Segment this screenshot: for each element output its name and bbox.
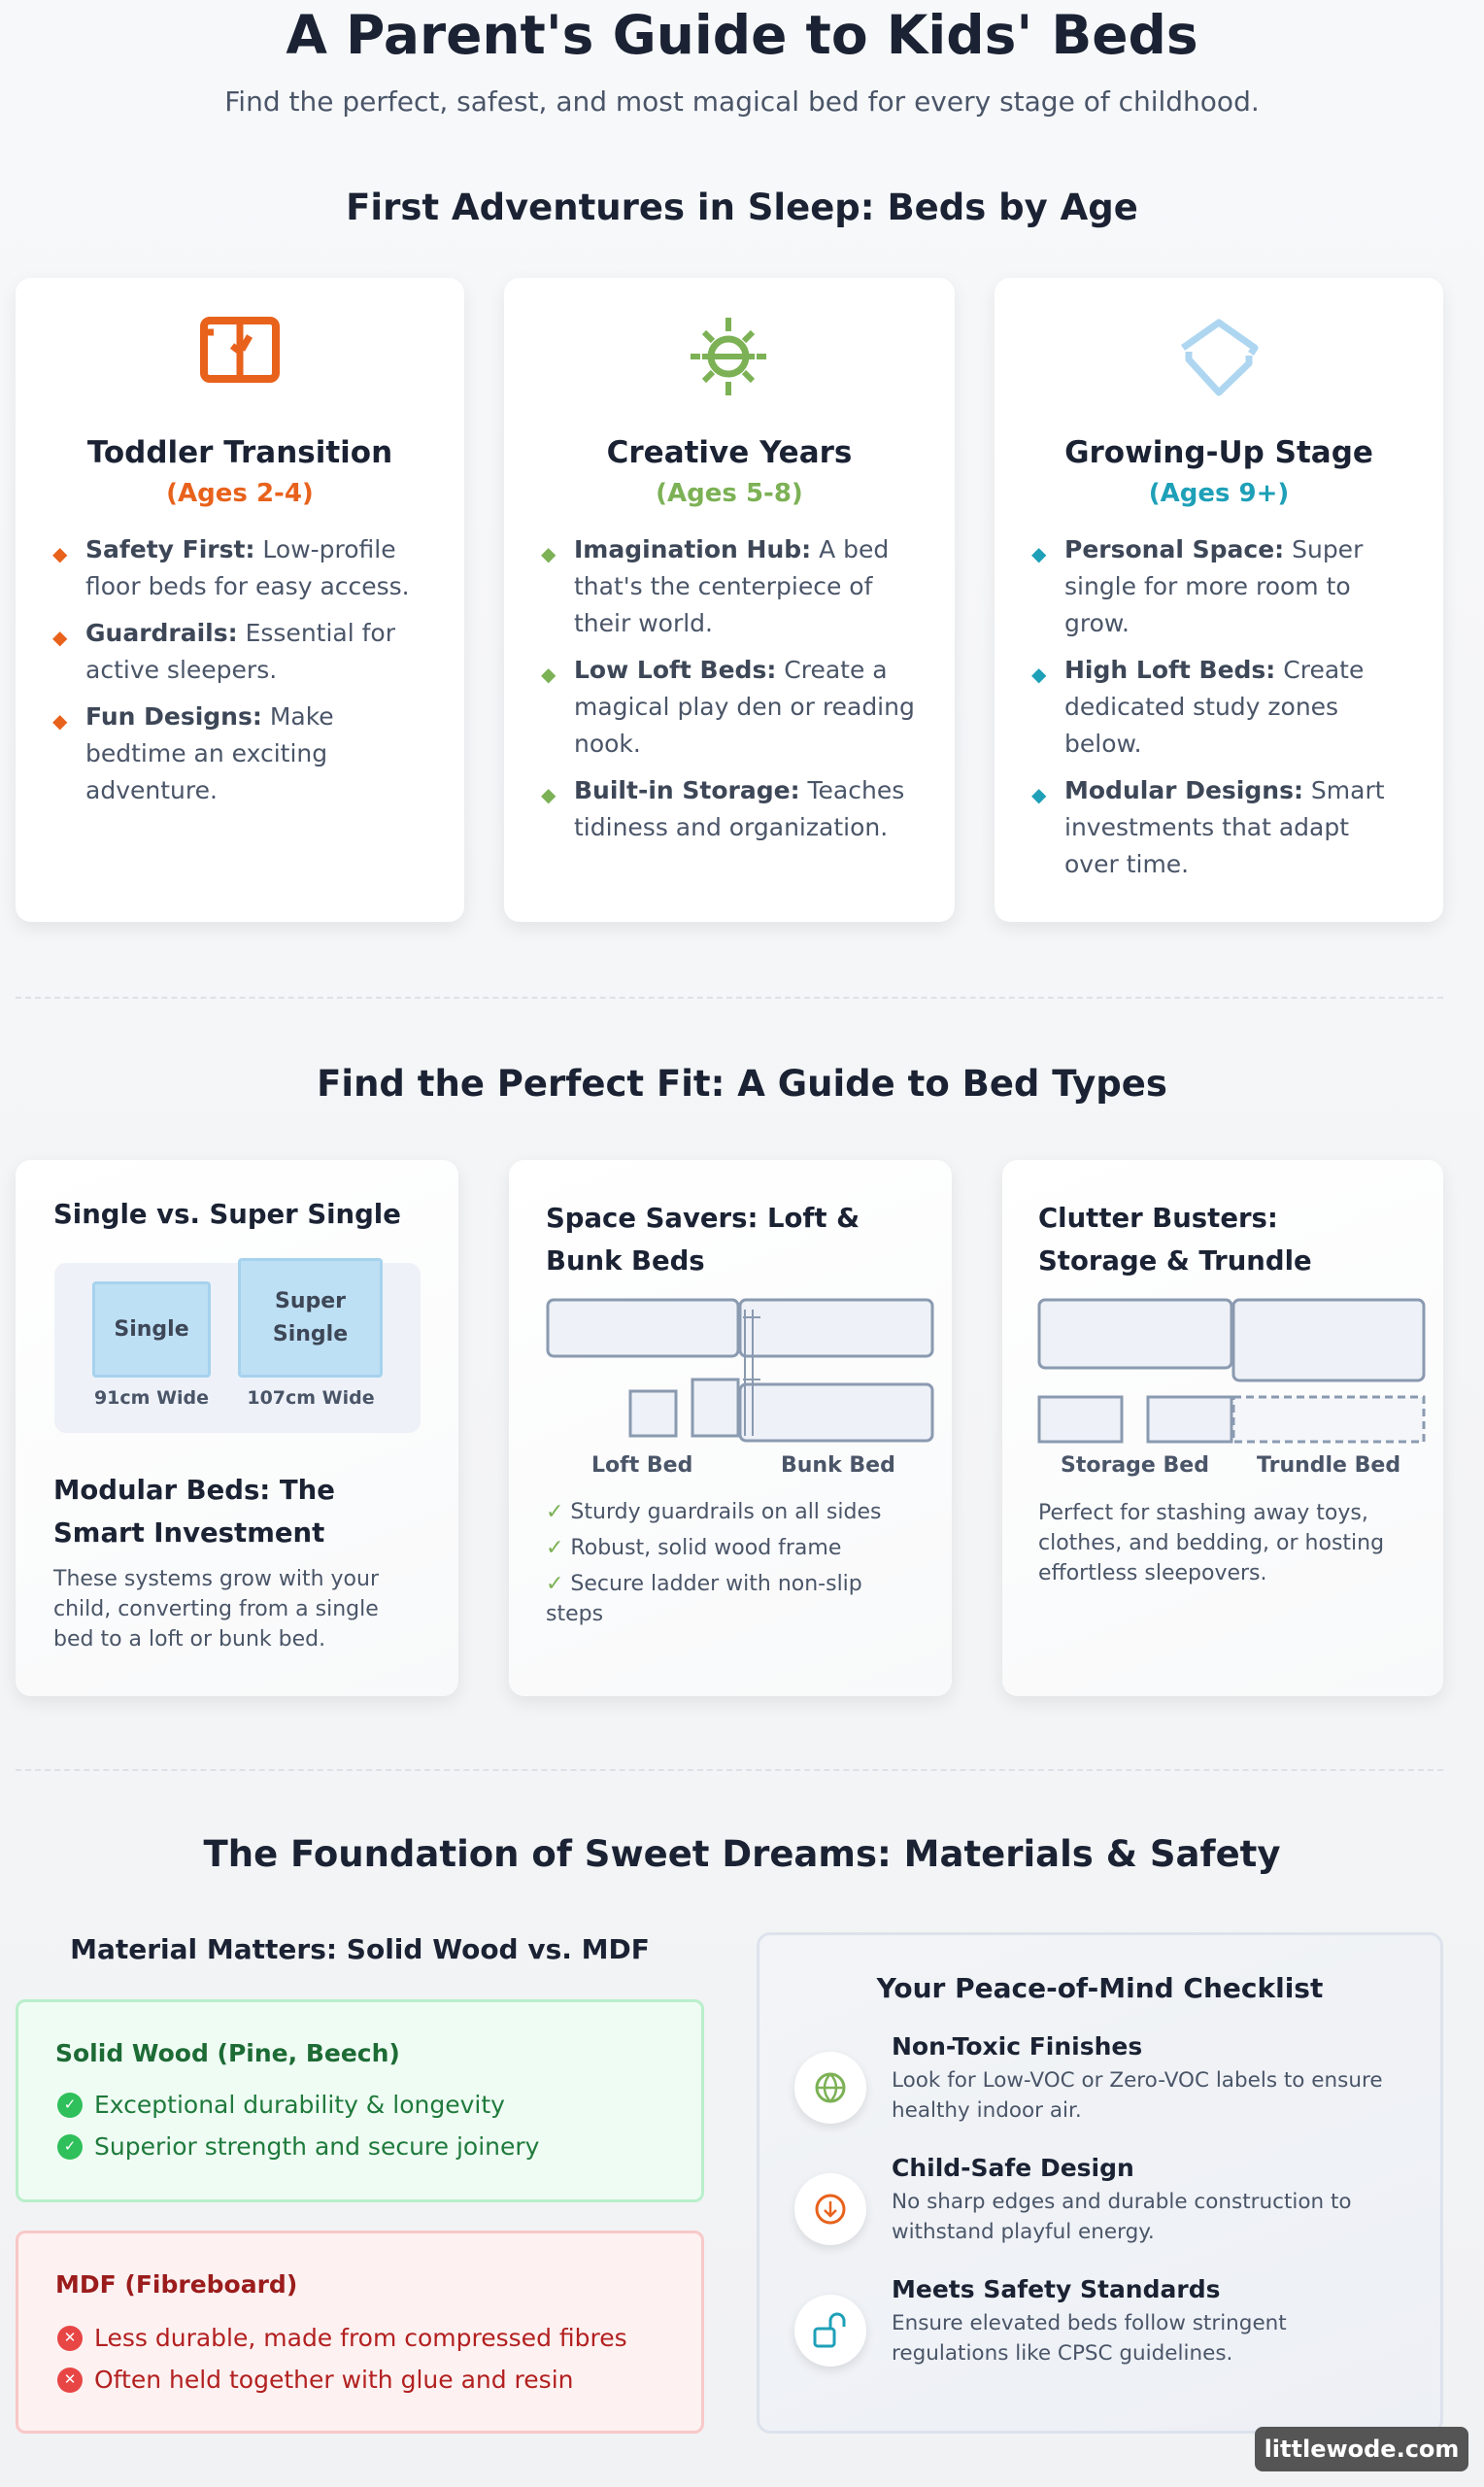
panel: checklist — [757, 1932, 1443, 2434]
cons list: Less durable, made from compressed fibres — [94, 2324, 627, 2352]
heading — [1038, 1203, 1312, 1277]
age label: (Ages 9+) — [1149, 479, 1289, 508]
modular heading: Modular Beds: The — [53, 1475, 335, 1506]
cons list: ✕ — [64, 2370, 76, 2388]
section heading: materials & safety: The Foundation of Sweet Dreams: Materials & Safety — [204, 1833, 1280, 1875]
item: non-toxic: Look for Low-VOC or Zero-VOC labels to ensure healthy indoor air. — [892, 2068, 1383, 2123]
item: child-safe: No sharp edges and durable construction to withstand playful energy. — [892, 2190, 1352, 2244]
bullet list: ◆ — [52, 626, 67, 649]
panel: toddler — [16, 278, 464, 922]
diagram: storage and trundle beds — [1037, 1298, 1426, 1444]
heading: Bunk Beds — [546, 1245, 705, 1277]
checklist: ✓ Sturdy guardrails on all sides — [546, 1500, 881, 1524]
heading: Solid Wood (Pine, Beech) — [55, 2039, 400, 2067]
cons list: ✕ — [64, 2329, 76, 2346]
panel: storage & trundle — [1002, 1160, 1443, 1696]
heading: Your Peace-of-Mind Checklist — [877, 1972, 1323, 2004]
heading: Toddler Transition — [87, 435, 392, 470]
description: Perfect for stashing away toys, clothes, and bedding, or hosting effortless sleepovers. — [1038, 1501, 1384, 1585]
cons list — [57, 2324, 627, 2394]
watermark: littlewode.com — [1265, 2436, 1459, 2463]
panel: single vs super single — [16, 1160, 458, 1696]
bullet list: ◆ — [1031, 663, 1046, 686]
panel: MDF — [16, 2231, 704, 2434]
heading: Growing-Up Stage — [1064, 435, 1373, 470]
panel: solid wood — [16, 1999, 704, 2202]
bullet list — [1031, 535, 1385, 878]
super single box: Super — [275, 1288, 346, 1313]
diagram labels: Loft Bed — [591, 1453, 692, 1478]
heading: Single vs. Super Single — [53, 1199, 401, 1230]
width labels: 91cm Wide — [94, 1387, 209, 1409]
bullet list: Personal Space: Super single for more room to grow. — [1064, 535, 1363, 637]
heading: Creative Years — [607, 435, 852, 470]
panel: growing up — [995, 278, 1443, 922]
pros list: ✓ — [64, 2095, 76, 2113]
size comparison diagram: 107cm Wide — [247, 1387, 375, 1409]
diagram labels: Storage Bed — [1061, 1453, 1209, 1478]
size comparison diagram — [54, 1263, 421, 1433]
modular heading: Smart Investment — [53, 1517, 324, 1549]
heading: Space Savers: Loft & — [546, 1203, 860, 1234]
panel: creative years — [504, 278, 955, 922]
icon: globe — [794, 2052, 866, 2124]
panel: loft & bunk: Bunk Bed — [781, 1453, 895, 1478]
subtitle: Find the perfect, safest, and most magical bed for every stage of childhood. — [224, 85, 1260, 118]
bullet list: ◆ — [541, 783, 556, 806]
bullet list: Guardrails: Essential for active sleepers. — [85, 619, 395, 684]
icon: arrow circle — [794, 2173, 866, 2245]
bullet list: ◆ — [52, 542, 67, 565]
heading: Storage & Trundle — [1038, 1245, 1312, 1277]
modular text: These systems grow with your child, converting from a single bed to a loft or bunk bed. — [53, 1567, 379, 1652]
bullet list: Imagination Hub: A bed that's the centerpiece of their world. — [574, 535, 889, 637]
item: standards — [793, 2275, 1287, 2372]
bullet list: ◆ — [1031, 783, 1046, 806]
single box — [92, 1281, 211, 1378]
heading — [546, 1203, 860, 1277]
icon: padlock — [794, 2295, 866, 2367]
bullet list: High Loft Beds: Create dedicated study zones below. — [1064, 656, 1364, 758]
bullet list — [541, 535, 915, 841]
super single box: Single — [273, 1321, 348, 1346]
text: Child-Safe Design — [892, 2154, 1134, 2182]
bullet list: ◆ — [541, 663, 556, 686]
item: standards: Ensure elevated beds follow stringent regulations like CPSC guidelines. — [892, 2311, 1287, 2366]
single box: Single — [114, 1317, 189, 1342]
cons list: Often held together with glue and resin — [94, 2366, 573, 2394]
text: Meets Safety Standards — [892, 2275, 1220, 2303]
bullet list: ◆ — [52, 709, 67, 732]
bullet list — [52, 535, 410, 804]
checklist — [546, 1500, 881, 1626]
panel: storage & trundle: Trundle Bed — [1257, 1453, 1400, 1478]
watermark — [1255, 2427, 1468, 2471]
heading: Clutter Busters: — [1038, 1203, 1278, 1234]
bullet list: Safety First: Low-profile floor beds for easy access. — [85, 535, 410, 600]
checklist: ✓ Robust, solid wood frame — [546, 1536, 841, 1560]
bullet list: Modular Designs: Smart investments that adapt over time. — [1064, 776, 1385, 878]
panel: loft & bunk — [509, 1160, 952, 1696]
bullet list: Fun Designs: Make bedtime an exciting adventure. — [85, 702, 334, 804]
pros list: ✓ — [64, 2137, 76, 2155]
age label: (Ages 2-4) — [166, 479, 314, 508]
pros list — [57, 2091, 539, 2161]
section heading: beds by age: First Adventures in Sleep: Beds by Age — [346, 187, 1138, 228]
bullet list: ◆ — [541, 542, 556, 565]
icon: house — [1181, 319, 1259, 396]
bullet list: ◆ — [1031, 542, 1046, 565]
checklist: ✓ Secure ladder with non-slip steps — [546, 1572, 862, 1626]
modular heading — [53, 1475, 335, 1549]
icon: sun — [691, 318, 766, 395]
bullet list: Built-in Storage: Teaches tidiness and organization. — [574, 776, 904, 841]
age label: (Ages 5-8) — [656, 479, 803, 508]
bullet list: Low Loft Beds: Create a magical play den or reading nook. — [574, 656, 915, 758]
text: Non-Toxic Finishes — [892, 2032, 1142, 2061]
heading: MDF (Fibreboard) — [55, 2270, 297, 2299]
subheading: material matters: Material Matters: Solid Wood vs. MDF — [70, 1933, 650, 1965]
item: child-safe — [793, 2154, 1352, 2250]
item: non-toxic — [793, 2032, 1383, 2129]
diagram: loft and bunk beds — [546, 1298, 934, 1442]
super single box — [238, 1258, 383, 1378]
pros list: Superior strength and secure joinery — [94, 2132, 539, 2161]
icon: toddler bed — [200, 317, 280, 383]
pros list: Exceptional durability & longevity — [94, 2091, 505, 2119]
title: A Parent's Guide to Kids' Beds — [286, 4, 1198, 66]
section heading: bed types: Find the Perfect Fit: A Guide to Bed Types — [317, 1063, 1167, 1105]
